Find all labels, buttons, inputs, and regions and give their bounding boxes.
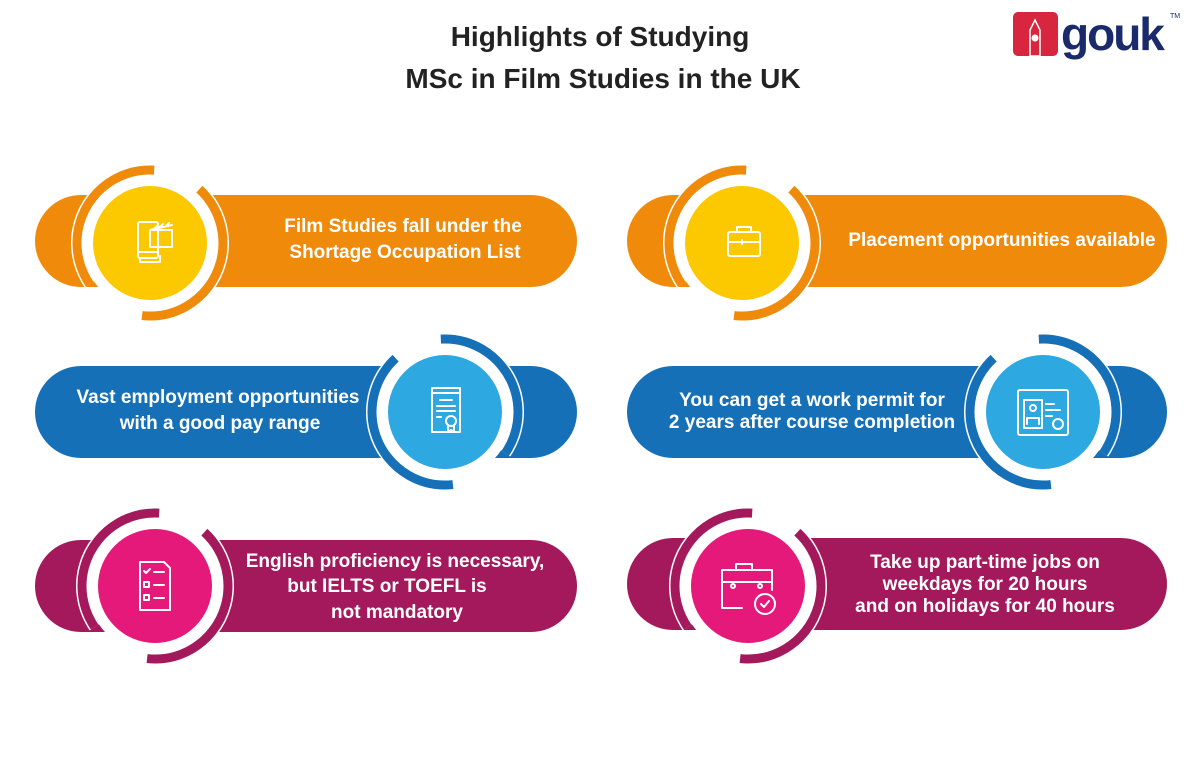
panel: shortage occupation list (35, 143, 577, 343)
logo: gouk: gouk (1061, 8, 1165, 60)
panel: english proficiency: but IELTS or TOEFL is (287, 576, 487, 597)
icon: ID card (1018, 390, 1068, 435)
logo: gouk (1013, 8, 1180, 60)
text: You can get a work permit for (679, 390, 945, 411)
logo: gouk: TM (1170, 13, 1180, 20)
text: Placement opportunities available (848, 230, 1156, 251)
icon: briefcase with clock (722, 564, 775, 614)
panel: english proficiency: not mandatory (331, 602, 463, 623)
panel: part-time jobs: weekdays for 20 hours (882, 574, 1087, 595)
panel: english proficiency (35, 486, 577, 686)
icon: checklist (140, 562, 170, 610)
panel: part-time jobs (627, 486, 1167, 686)
panel: work permit: 2 years after course completion (669, 412, 955, 433)
title: MSc in Film Studies in the UK (405, 63, 801, 94)
panel: employment opportunities (35, 312, 577, 512)
icon: briefcase (728, 227, 760, 256)
text: Take up part-time jobs on (870, 552, 1100, 573)
title: Highlights of Studying (451, 21, 749, 52)
text: Film Studies fall under the (284, 216, 522, 237)
icon: book and clapperboard (138, 222, 172, 262)
text: English proficiency is necessary, (246, 551, 544, 572)
text: Vast employment opportunities (77, 387, 359, 408)
panel: employment opportunities: with a good pay range (119, 413, 320, 434)
panel: placement opportunities (627, 143, 1167, 343)
title (405, 21, 801, 94)
icon: certificate (432, 388, 460, 432)
panel: shortage occupation list: Shortage Occupation List (289, 242, 521, 263)
panel: part-time jobs: and on holidays for 40 hours (855, 596, 1115, 617)
panel: work permit (627, 312, 1167, 512)
